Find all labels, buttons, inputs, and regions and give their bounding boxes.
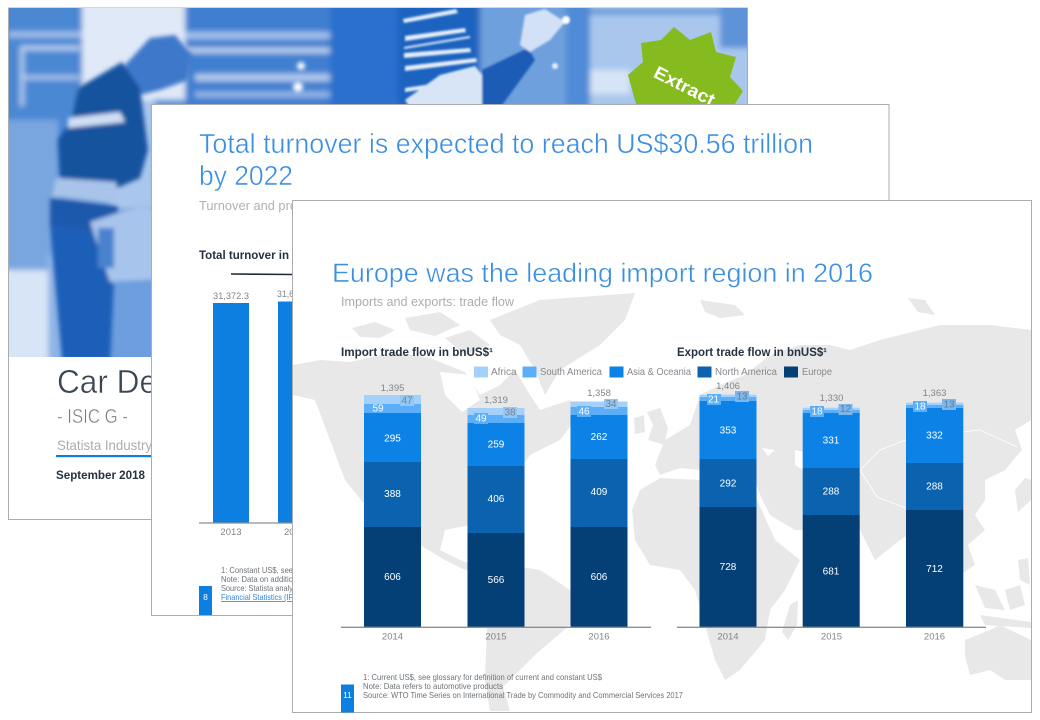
page number 11 <box>341 684 354 712</box>
export 2016 bar: 332 <box>926 430 943 442</box>
slide 3 title: Europe was the leading import region in 2016 <box>332 258 873 288</box>
cover date: September 2018 <box>56 470 146 482</box>
slide 3 subtitle: Imports and exports: trade flow <box>341 294 515 309</box>
bar chart: total turnover: 2013 <box>220 527 242 538</box>
import 2015 bar <box>468 395 524 642</box>
slide 2 footnotes <box>221 566 294 602</box>
page number 11: 11 <box>343 690 352 700</box>
import 2016 bar: 409 <box>591 487 608 498</box>
export chart heading: Export trade flow in bnUS$¹ <box>677 347 827 359</box>
export 2016 bar: 288 <box>926 482 943 492</box>
import 2014 bar: 388 <box>384 489 401 500</box>
bar chart: total turnover: 20 <box>284 527 295 538</box>
page number 8: 8 <box>203 592 208 602</box>
export 2015 bar <box>803 393 860 642</box>
import stacked bar chart <box>341 383 651 642</box>
import 2016 bar: 2016 <box>588 632 610 642</box>
legend: Asia & Oceania <box>627 367 691 378</box>
import 2014 bar: 47 <box>401 396 413 406</box>
import 2016 bar: 1,358 <box>587 388 611 399</box>
import chart heading: Import trade flow in bnUS$¹ <box>341 347 493 359</box>
export 2014 bar <box>700 381 756 642</box>
import 2016 bar: 606 <box>591 572 608 583</box>
export 2015 bar: 12 <box>840 404 851 415</box>
import 2015 bar: 259 <box>488 440 505 450</box>
import 2015 bar: 1,319 <box>484 395 508 406</box>
import 2014 bar: 606 <box>384 572 401 583</box>
bar chart: total turnover: 31,372.3 <box>213 291 249 302</box>
import 2016 bar: 34 <box>605 399 617 410</box>
import 2014 bar: 59 <box>372 404 384 414</box>
export 2014 bar: 1,406 <box>716 381 740 392</box>
background world map <box>293 293 1031 711</box>
import 2014 bar <box>364 383 421 642</box>
export 2015 bar: 1,330 <box>820 393 843 404</box>
slide 3 footnotes: 1: Current US$, see glossary for definition of current and constant US$ <box>363 673 602 682</box>
slide 2 title: by 2022 <box>199 160 293 191</box>
export 2016 bar: 712 <box>926 564 943 575</box>
legend: South America <box>540 367 602 378</box>
import 2015 bar: 566 <box>488 575 505 586</box>
export 2015 bar: 288 <box>823 486 840 498</box>
slide 2 title: Total turnover is expected to reach US$30.56 trillion <box>199 128 813 159</box>
legend: North America <box>715 367 777 378</box>
import 2016 bar: 262 <box>591 432 608 443</box>
import 2014 bar: 1,395 <box>381 383 404 394</box>
slide 2: total turnover <box>152 104 889 616</box>
slide 2 title <box>199 128 813 191</box>
slide 3 footnotes: Source: WTO Time Series on International Trade by Commodity and Commercial Services 2017 <box>363 691 683 700</box>
slide 3: trade flow <box>292 200 1032 712</box>
slide 2 footnotes: Note: Data on additio <box>221 575 293 584</box>
slide 2 footnotes: Source: Statista analy <box>221 584 294 593</box>
export 2016 bar: 1,363 <box>923 388 946 399</box>
badge: Extract: Extract <box>651 62 718 110</box>
import 2016 bar: 46 <box>578 406 590 418</box>
badge: Extract <box>628 27 743 110</box>
slide 2 footnotes: 1: Constant US$, see <box>221 566 293 575</box>
import 2015 bar: 2015 <box>485 632 507 642</box>
export 2015 bar: 681 <box>823 566 840 578</box>
export stacked bar chart <box>677 381 986 642</box>
slide 2 footnotes: Financial Statistics (IF <box>221 593 293 602</box>
accent underline <box>56 455 152 457</box>
export 2014 bar: 292 <box>720 478 737 490</box>
legend <box>474 366 832 378</box>
import 2016 bar <box>570 388 628 642</box>
export 2015 bar: 18 <box>811 406 823 418</box>
export 2014 bar: 13 <box>736 392 748 402</box>
chart heading: Total turnover in <box>199 250 289 262</box>
export 2014 bar: 353 <box>720 426 737 436</box>
import 2014 bar: 2014 <box>382 632 403 642</box>
report series name: Statista Industry <box>57 437 152 453</box>
import 2015 bar: 406 <box>488 494 505 505</box>
export 2015 bar: 331 <box>823 436 840 446</box>
legend: Europe <box>802 367 832 378</box>
slide 3 footnotes <box>363 673 683 700</box>
import 2014 bar: 295 <box>384 434 401 444</box>
export 2016 bar: 18 <box>914 402 926 412</box>
export 2014 bar: 2014 <box>717 632 739 642</box>
page number 8 <box>199 586 212 615</box>
slide 1: report cover <box>0 0 760 520</box>
slide 2 subtitle: Turnover and pro <box>199 199 297 213</box>
cover photo: shoppers in blue duotone <box>0 0 760 370</box>
export 2016 bar: 2016 <box>924 632 945 642</box>
slide 3 footnotes: Note: Data refers to automotive products <box>363 682 503 691</box>
export 2014 bar: 21 <box>708 394 719 406</box>
import 2015 bar: 49 <box>475 414 487 424</box>
export 2015 bar: 2015 <box>821 632 842 642</box>
export 2016 bar <box>906 388 963 642</box>
bar chart: total turnover: 31,6 <box>277 289 294 300</box>
legend: Africa <box>491 367 517 378</box>
cover title: Car De <box>57 363 157 400</box>
import 2015 bar: 38 <box>504 408 516 418</box>
export 2016 bar: 13 <box>943 400 955 410</box>
cover subtitle: - ISIC G - <box>57 406 128 428</box>
export 2014 bar: 728 <box>720 562 737 573</box>
bar chart: total turnover <box>199 274 295 538</box>
